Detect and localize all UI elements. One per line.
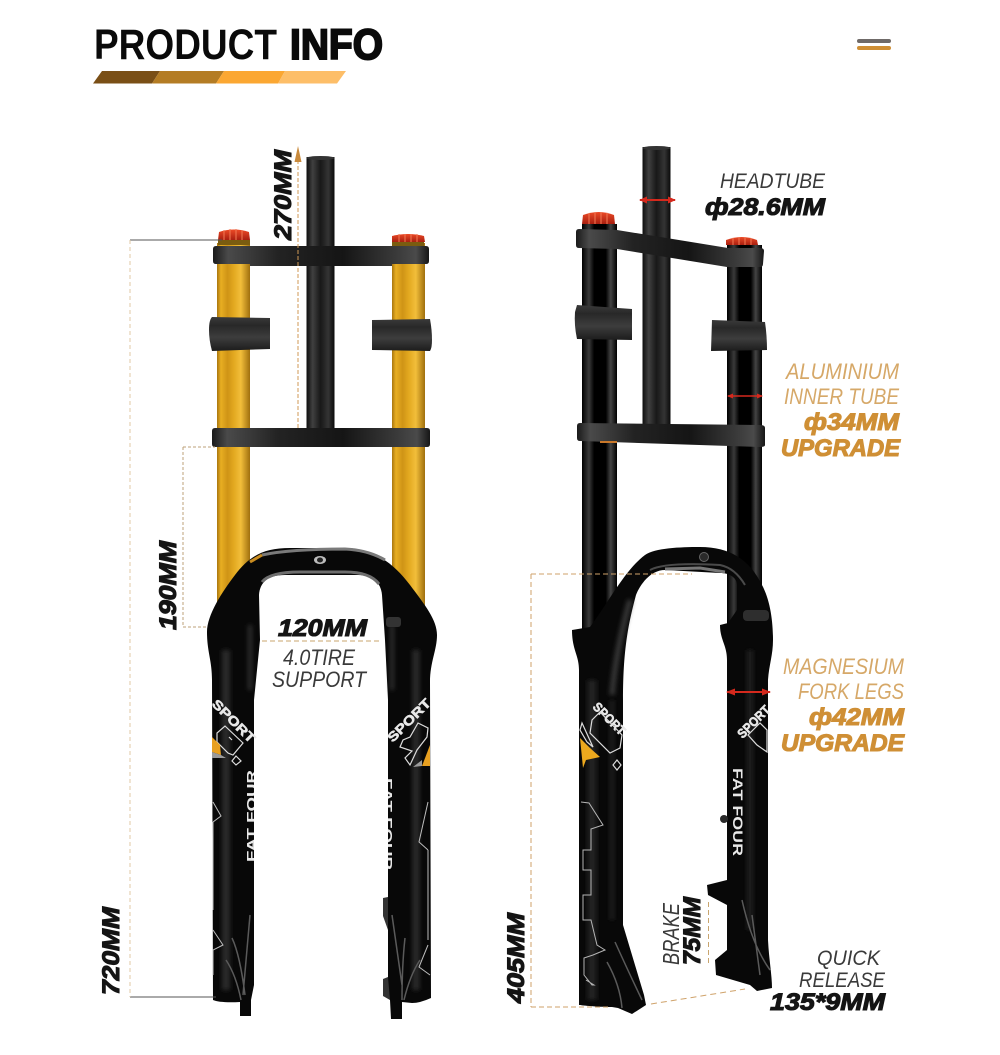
callout: magnesium fork legs: UPGRADE xyxy=(781,730,905,757)
dimension: brake 75mm: BRAKE xyxy=(658,902,684,965)
rear boss xyxy=(720,815,728,823)
dimension: 120mm tire support: 120MM xyxy=(278,615,368,642)
arch highlights xyxy=(226,549,416,990)
dimension: quick release: 135*9MM xyxy=(770,989,886,1016)
dimension: quick release: QUICK xyxy=(817,947,881,970)
lower crown xyxy=(212,428,430,447)
title underline stripes xyxy=(93,71,346,84)
logo: sport right leg: SPORT xyxy=(384,696,434,745)
gold inner tubes xyxy=(217,243,425,613)
logo: sport right leg: SPORT xyxy=(734,702,773,741)
logo: sport left leg: SPORT xyxy=(209,696,258,746)
fork lower arch and legs xyxy=(572,547,773,1014)
cable clamp xyxy=(386,617,401,627)
logo: sport left leg xyxy=(580,699,629,770)
lower crown xyxy=(577,423,765,447)
logo: sport right leg xyxy=(384,696,434,767)
dimension: 120mm tire support: SUPPORT xyxy=(272,667,367,692)
dimension: 720mm xyxy=(98,240,222,997)
dimension: 405mm: 405MM xyxy=(503,912,530,1004)
dimension: quick release xyxy=(651,947,886,1016)
upper crown xyxy=(213,246,429,266)
title: PRODUCT xyxy=(94,21,277,69)
dimension: brake 75mm: 75MM xyxy=(679,896,706,965)
callout: aluminium inner tube: UPGRADE xyxy=(781,435,901,462)
callout: headtube: ф28.6MM xyxy=(705,194,826,221)
logo: fat four left leg: FAT FOUR xyxy=(244,769,259,862)
callout: magnesium fork legs: MAGNESIUM xyxy=(783,654,905,679)
foam bands xyxy=(209,317,432,351)
steerer tube xyxy=(642,146,670,427)
dimension: quick release: RELEASE xyxy=(799,969,886,992)
logo: sport left leg: SPORT xyxy=(590,699,629,738)
black inner tubes xyxy=(582,224,762,634)
red top caps xyxy=(582,212,758,245)
cable clamp xyxy=(743,610,769,621)
logo: fat four right leg: FAT FOUR xyxy=(730,768,746,856)
callout: aluminium inner tube: ALUMINIUM xyxy=(784,359,900,384)
callout: aluminium inner tube: INNER TUBE xyxy=(784,384,899,409)
dropout highlights xyxy=(607,900,770,1008)
callout: magnesium fork legs: FORK LEGS xyxy=(798,679,904,704)
foam bands xyxy=(575,305,767,351)
dropout highlights xyxy=(226,915,420,1000)
dimension: 270mm with arrow xyxy=(270,146,302,428)
dimension: brake 75mm xyxy=(658,896,708,965)
dimension: 405mm xyxy=(503,574,692,1007)
logo: sport left leg xyxy=(209,696,258,765)
title: INFO xyxy=(290,21,383,69)
arch highlights xyxy=(592,564,750,1000)
callout: aluminium inner tube: ф34MM xyxy=(804,409,900,436)
icon: menu bars xyxy=(857,39,891,50)
arch bolt xyxy=(700,552,708,562)
steerer tube xyxy=(306,156,334,432)
fork lower arch and legs xyxy=(207,548,437,1019)
callout: headtube: HEADTUBE xyxy=(720,170,826,193)
dimension: 270mm with arrow: 270MM xyxy=(270,149,297,241)
logo: sport right leg xyxy=(734,702,773,752)
callout: aluminium inner tube xyxy=(727,359,901,462)
upper crown xyxy=(576,229,764,267)
right fork: black version xyxy=(572,146,773,1014)
dimension: 120mm tire support: 4.0TIRE xyxy=(283,645,355,670)
leg graphic lines xyxy=(213,802,430,975)
arch bolt xyxy=(314,556,326,564)
callout: headtube xyxy=(639,170,826,221)
dimension: 720mm: 720MM xyxy=(98,906,125,995)
red top caps xyxy=(218,229,425,246)
leg graphic: brand outline xyxy=(581,802,605,985)
left fork: gold version xyxy=(207,156,437,1019)
dimension: 120mm tire support xyxy=(262,615,382,692)
dimension: 190mm xyxy=(155,447,215,630)
logo: fat four right leg: FAT FOUR xyxy=(380,778,395,871)
callout: magnesium fork legs: ф42MM xyxy=(809,704,905,731)
callout: magnesium fork legs xyxy=(726,654,905,757)
brake stubs xyxy=(383,897,390,1000)
dimension: 190mm: 190MM xyxy=(155,540,182,630)
